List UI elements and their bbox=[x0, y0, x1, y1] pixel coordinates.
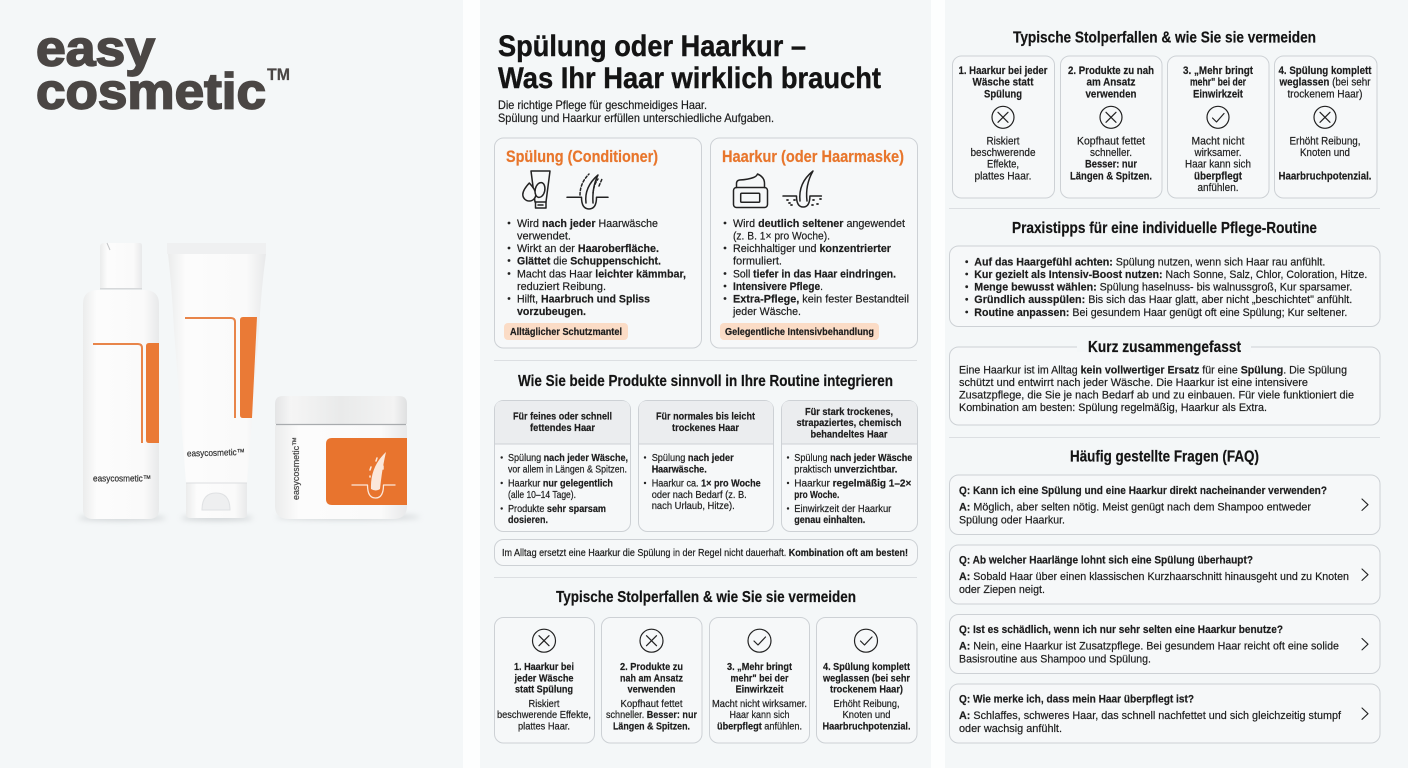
pitfall title: weglassen (bei sehr bbox=[1279, 77, 1371, 89]
icon: chevron bbox=[1362, 638, 1368, 650]
pitfall text: überpflegt bbox=[1194, 170, 1242, 182]
product: hair mask jar bbox=[275, 396, 420, 520]
FAQ item 1: Q: Kann ich eine Spülung und eine Haarkur direkt nacheinander verwenden? bbox=[959, 485, 1327, 497]
card list: Haarkur nur gelegentlich bbox=[508, 479, 613, 490]
pitfall title: 1. Haarkur bei jeder bbox=[958, 65, 1048, 77]
card list: Einwirkzeit der Haarkur bbox=[794, 504, 892, 515]
pitfall text: anfühlen. bbox=[1198, 182, 1238, 194]
summary text bbox=[959, 364, 1354, 414]
card list: Spülung nach jeder Wäsche bbox=[794, 453, 913, 464]
pitfall text bbox=[1278, 136, 1372, 182]
list: Spülung facts: reduziert Reibung. bbox=[517, 281, 606, 293]
FAQ item 2: Q: Ab welcher Haarlänge lohnt sich eine Spülung überhaupt? bbox=[959, 554, 1253, 566]
summary text: Eine Haarkur ist im Alltag kein vollwertiger Ersatz für eine Spülung. Die Spülung bbox=[959, 364, 1347, 376]
icon: check bbox=[748, 629, 771, 652]
FAQ item 4: oder wachsig anfühlt. bbox=[959, 723, 1062, 735]
card list: Spülung nach jeder Wäsche, bbox=[508, 453, 628, 464]
logo: easy cosmetic: TM bbox=[267, 66, 290, 84]
pitfall text: wirksamer. bbox=[1194, 147, 1242, 159]
card list: praktisch unverzichtbar. bbox=[794, 464, 897, 475]
list: Spülung facts: Wirkt an der Haaroberfläche. bbox=[517, 243, 659, 255]
card: pitfall 2 bbox=[1060, 56, 1162, 198]
pitfall text: plattes Haar. bbox=[974, 170, 1032, 182]
pitfall title: verwenden bbox=[1086, 88, 1137, 100]
list: Spülung facts bbox=[508, 218, 686, 318]
heading: routine: Wie Sie beide Produkte sinnvoll in Ihre Routine integrieren bbox=[518, 373, 893, 390]
title: Spülung oder Haarkur – bbox=[498, 30, 806, 63]
pitfall title bbox=[1068, 65, 1154, 100]
card list: Spülung nach jeder bbox=[652, 453, 734, 464]
icon: chevron bbox=[1362, 569, 1368, 580]
heading: pitfalls: Typische Stolperfallen & wie Sie sie vermeiden bbox=[556, 589, 856, 606]
pitfall text: 1. Haarkur bei bbox=[514, 662, 574, 673]
card: pitfall 2 bbox=[602, 618, 702, 743]
panel: brand and products bbox=[0, 0, 463, 768]
product: conditioner bottle: easycosmetic™ bbox=[93, 474, 151, 484]
logo: easy cosmetic bbox=[36, 20, 290, 120]
pitfall text: jeder Wäsche bbox=[514, 673, 574, 684]
heading: summary: Kurz zusammengefasst bbox=[1088, 339, 1242, 356]
card list: genau einhalten. bbox=[794, 515, 865, 526]
panel: main comparison bbox=[480, 0, 931, 768]
pitfall text bbox=[497, 662, 591, 732]
card list: vor allem in Längen & Spitzen. bbox=[508, 464, 627, 475]
logo: easy cosmetic: cosmetic bbox=[36, 64, 266, 120]
card: Spülung bbox=[494, 138, 702, 348]
card: normal hair routine bbox=[638, 400, 774, 532]
pitfall text: Einwirkzeit bbox=[736, 685, 784, 696]
pitfall text: Erhöht Reibung, bbox=[834, 699, 900, 710]
pitfall text: verwenden bbox=[628, 685, 676, 696]
box: practice tips: Kur gezielt als Intensiv-Boost nutzen: Nach Sonne, Salz, Chlor, Coloration, Hitze. bbox=[974, 269, 1367, 281]
pitfall text bbox=[970, 136, 1036, 182]
pitfall text: beschwerende bbox=[970, 147, 1036, 159]
FAQ item 1: A: Möglich, aber selten nötig. Meist genügt nach dem Shampoo entweder bbox=[959, 502, 1311, 514]
card header bbox=[513, 412, 612, 434]
list: Spülung facts: Hilft, Haarbruch und Spliss bbox=[517, 294, 650, 306]
pitfall text bbox=[1185, 136, 1251, 194]
card header: Für feines oder schnell bbox=[513, 412, 612, 422]
heading: Spülung: Spülung (Conditioner) bbox=[506, 148, 658, 166]
card list: pro Woche. bbox=[794, 490, 839, 501]
list: Spülung facts: Glättet die Schuppenschicht. bbox=[517, 256, 661, 268]
pitfall text: Längen & Spitzen. bbox=[613, 721, 690, 732]
tag: Gelegentliche Intensivbehandlung: Gelegentliche Intensivbehandlung bbox=[725, 326, 874, 338]
callout: combination note: Im Alltag ersetzt eine Haarkur die Spülung in der Regel nicht dauerhaft. Kombination oft am besten! bbox=[502, 548, 908, 559]
card: Haarkur bbox=[710, 138, 918, 348]
list: Haarkur facts: Extra-Pflege, kein fester Bestandteil bbox=[733, 294, 909, 306]
pitfall title bbox=[958, 65, 1048, 100]
pitfall text: Kopfhaut fettet bbox=[620, 699, 683, 710]
title bbox=[498, 30, 881, 95]
icon: chevron bbox=[1362, 499, 1368, 510]
icon: check bbox=[1207, 106, 1229, 128]
FAQ item 2: A: Sobald Haar über einen klassischen Kurzhaarschnitt hinausgeht und zu Knoten bbox=[959, 571, 1349, 583]
card list bbox=[500, 453, 628, 526]
card: damaged hair routine bbox=[782, 400, 918, 532]
pitfall text: Haar kann sich bbox=[730, 710, 790, 721]
list: Haarkur facts: Reichhaltiger und konzentrierter bbox=[733, 243, 892, 255]
summary text: Kombination am besten: Spülung regelmäßig, Haarkur als Extra. bbox=[959, 402, 1267, 414]
pitfall title: trockenem Haar) bbox=[1288, 88, 1363, 100]
card: pitfall 3 bbox=[1168, 56, 1269, 198]
list: Haarkur facts bbox=[724, 218, 909, 318]
list: Spülung facts: Wird nach jeder Haarwäsche bbox=[517, 218, 658, 230]
card header bbox=[796, 407, 902, 440]
list: Haarkur facts: Intensivere Pflege. bbox=[733, 281, 823, 293]
card list: Haarkur ca. 1× pro Woche bbox=[652, 479, 761, 490]
card header: trockenes Haar bbox=[672, 423, 739, 434]
card: fine hair routine bbox=[494, 400, 630, 532]
tag: Alltäglicher Schutzmantel bbox=[504, 323, 628, 340]
summary text: Zusatzpflege, die Sie je nach Bedarf ab und zu einbauen. Für viele funktioniert die bbox=[959, 390, 1354, 402]
box: practice tips: Routine anpassen: Bei gesundem Haar genügt oft eine Spülung; Kur seltener. bbox=[974, 307, 1347, 319]
pitfall text bbox=[822, 662, 911, 732]
list: Haarkur facts: formuliert. bbox=[733, 256, 782, 268]
box: practice tips: Menge bewusst wählen: Spülung haselnuss- bis walnussgroß, Kur sparsamer. bbox=[974, 282, 1352, 294]
FAQ item 2: oder Ziepen neigt. bbox=[959, 584, 1045, 596]
card list: dosieren. bbox=[508, 515, 548, 526]
pitfall text bbox=[1070, 136, 1152, 182]
pitfall text bbox=[712, 662, 807, 732]
icon: cream jar bbox=[734, 174, 768, 208]
card list: oder nach Bedarf (z. B. bbox=[652, 490, 747, 501]
card header: Für stark trockenes, bbox=[805, 407, 893, 418]
list: Haarkur facts: jeder Wäsche. bbox=[732, 306, 801, 318]
pitfall text: überpflegt anfühlen. bbox=[717, 721, 802, 732]
list: Spülung facts: verwendet. bbox=[517, 230, 571, 242]
list: Haarkur facts: (z. B. 1× pro Woche). bbox=[733, 230, 830, 242]
pitfall text: nah am Ansatz bbox=[620, 673, 683, 684]
pitfall title: Wäsche statt bbox=[972, 77, 1034, 89]
card header bbox=[656, 412, 756, 434]
card: pitfall 4 bbox=[1274, 56, 1377, 198]
subtitle: Spülung und Haarkur erfüllen unterschiedliche Aufgaben. bbox=[498, 111, 774, 125]
product: conditioner tube: easycosmetic™ bbox=[187, 447, 245, 458]
card header: fettendes Haar bbox=[530, 423, 595, 434]
icon: cross bbox=[1314, 106, 1336, 128]
title: Was Ihr Haar wirklich braucht bbox=[498, 62, 881, 95]
box: summary bbox=[950, 339, 1380, 425]
pitfall title: 3. „Mehr bringt bbox=[1183, 65, 1253, 77]
icon: tube with drops bbox=[523, 171, 550, 208]
card: pitfall 1 bbox=[494, 618, 594, 743]
FAQ item 3 bbox=[950, 614, 1380, 674]
icon: hair with cuticle bbox=[567, 174, 608, 209]
pitfall title bbox=[1278, 65, 1372, 100]
pitfall text: Macht nicht wirksamer. bbox=[712, 699, 807, 710]
pitfall text bbox=[606, 662, 697, 732]
tag: Alltäglicher Schutzmantel: Alltäglicher Schutzmantel bbox=[510, 326, 622, 338]
pitfall title bbox=[1183, 65, 1253, 100]
icon: cross bbox=[532, 629, 556, 652]
icon: check bbox=[854, 629, 878, 652]
pitfall title: am Ansatz bbox=[1086, 77, 1136, 89]
heading: pitfalls: Typische Stolperfallen & wie Sie sie vermeiden bbox=[1013, 30, 1316, 47]
panel: tips and FAQ bbox=[945, 0, 1408, 768]
FAQ item 1: Spülung oder Haarkur. bbox=[959, 514, 1065, 526]
card list: Produkte sehr sparsam bbox=[508, 504, 606, 515]
card: pitfall 1 bbox=[952, 56, 1054, 198]
callout: combination note bbox=[494, 540, 918, 566]
pitfall text: statt Spülung bbox=[515, 685, 573, 696]
pitfall title: Spülung bbox=[984, 88, 1022, 100]
pitfall title: mehr" bei der bbox=[1190, 77, 1246, 89]
pitfall text: mehr" bei der bbox=[730, 673, 789, 684]
pitfall text: plattes Haar. bbox=[518, 721, 570, 732]
FAQ item 2 bbox=[950, 545, 1380, 604]
pitfall text: weglassen (bei sehr bbox=[822, 673, 910, 684]
box: practice tips: Gründlich ausspülen: Bis sich das Haar glatt, aber nicht „beschichtet" anfühlt. bbox=[974, 294, 1352, 306]
pitfall text: Kopfhaut fettet bbox=[1077, 136, 1146, 148]
product: hair mask jar: easycosmetic™ bbox=[291, 437, 302, 500]
pitfall text: Macht nicht bbox=[1192, 136, 1245, 148]
pitfall text: beschwerende Effekte, bbox=[497, 710, 591, 721]
icon: chevron bbox=[1362, 708, 1368, 719]
pitfall text: Riskiert bbox=[528, 699, 560, 710]
card header: Für normales bis leicht bbox=[656, 412, 756, 422]
summary text: schützt und entwirrt nach jeder Wäsche. Die Haarkur ist eine intensivere bbox=[959, 377, 1308, 389]
logo: easy cosmetic: easy bbox=[36, 20, 155, 76]
FAQ item 3: A: Nein, eine Haarkur ist Zusatzpflege. Bei gesundem Haar reicht oft eine solide bbox=[959, 640, 1339, 652]
pitfall text: Haarbruchpotenzial. bbox=[1278, 170, 1372, 182]
card header: behandeltes Haar bbox=[810, 430, 888, 440]
heading: Haarkur: Haarkur (oder Haarmaske) bbox=[722, 148, 904, 166]
icon: cross bbox=[640, 629, 663, 652]
product: conditioner bottle bbox=[78, 243, 166, 520]
box: practice tips: Auf das Haargefühl achten: Spülung nutzen, wenn sich Haar rau anfühlt. bbox=[974, 256, 1325, 268]
pitfall text: schneller. Besser: nur bbox=[606, 710, 697, 721]
pitfall text: Längen & Spitzen. bbox=[1070, 170, 1152, 182]
pitfall text: 2. Produkte zu bbox=[620, 662, 683, 673]
pitfall text: Effekte, bbox=[987, 159, 1019, 171]
icon: hair follicle on jar bbox=[352, 452, 395, 498]
card list bbox=[787, 453, 913, 526]
FAQ item 3: Basisroutine aus Shampoo und Spülung. bbox=[959, 654, 1151, 666]
pitfall title: Einwirkzeit bbox=[1193, 88, 1243, 100]
icon: cross bbox=[1100, 106, 1122, 128]
subtitle bbox=[498, 98, 774, 125]
pitfall text: Riskiert bbox=[986, 136, 1020, 148]
box: practice tips bbox=[950, 246, 1380, 326]
pitfall text: 3. „Mehr bringt bbox=[727, 662, 793, 673]
pitfall text: 4. Spülung komplett bbox=[823, 662, 911, 673]
FAQ item 4: Q: Wie merke ich, dass mein Haar überpflegt ist? bbox=[959, 694, 1194, 706]
FAQ item 4: A: Schlaffes, schweres Haar, das schnell nachfettet und sich gleichzeitig stumpf bbox=[959, 710, 1342, 722]
icon: hair with scalp bbox=[783, 171, 821, 207]
pitfall text: trockenem Haar) bbox=[830, 685, 903, 696]
icon: cross bbox=[992, 106, 1014, 128]
subtitle: Die richtige Pflege für geschmeidiges Haar. bbox=[498, 98, 707, 112]
card list bbox=[644, 453, 761, 512]
pitfall text: Knoten und bbox=[842, 710, 891, 721]
list: Haarkur facts: Soll tiefer in das Haar eindringen. bbox=[733, 268, 896, 280]
card: pitfall 3 bbox=[710, 618, 810, 743]
FAQ item 1 bbox=[950, 475, 1380, 534]
pitfall title: 2. Produkte zu nah bbox=[1068, 65, 1154, 77]
card list: nach Urlaub, Hitze). bbox=[652, 501, 735, 512]
list: Haarkur facts: Wird deutlich seltener angewendet bbox=[733, 218, 906, 230]
FAQ item 3: Q: Ist es schädlich, wenn ich nur sehr selten eine Haarkur benutze? bbox=[959, 624, 1283, 636]
pitfall text: schneller. bbox=[1090, 147, 1132, 159]
pitfall text: Knoten und bbox=[1300, 147, 1350, 159]
product: conditioner tube bbox=[167, 243, 266, 520]
card list: Haarkur regelmäßig 1–2× bbox=[794, 479, 911, 490]
heading: practice tips: Praxistipps für eine individuelle Pflege-Routine bbox=[1012, 220, 1317, 237]
pitfall text: Haar kann sich bbox=[1185, 159, 1251, 171]
list: Spülung facts: vorzubeugen. bbox=[517, 306, 586, 318]
pitfall title: 4. Spülung komplett bbox=[1278, 65, 1372, 77]
card header: strapaziertes, chemisch bbox=[796, 418, 902, 429]
card list: Haarwäsche. bbox=[652, 464, 707, 475]
FAQ item 4 bbox=[950, 684, 1380, 743]
card list: (alle 10–14 Tage). bbox=[508, 490, 576, 501]
tag: Gelegentliche Intensivbehandlung bbox=[720, 323, 879, 340]
pitfall text: Haarbruchpotenzial. bbox=[822, 721, 911, 732]
heading: FAQ: Häufig gestellte Fragen (FAQ) bbox=[1070, 449, 1259, 466]
list: Spülung facts: Macht das Haar leichter kämmbar, bbox=[517, 268, 686, 280]
card: pitfall 4 bbox=[816, 618, 917, 743]
pitfall text: Besser: nur bbox=[1085, 159, 1137, 171]
pitfall text: Erhöht Reibung, bbox=[1290, 136, 1360, 148]
